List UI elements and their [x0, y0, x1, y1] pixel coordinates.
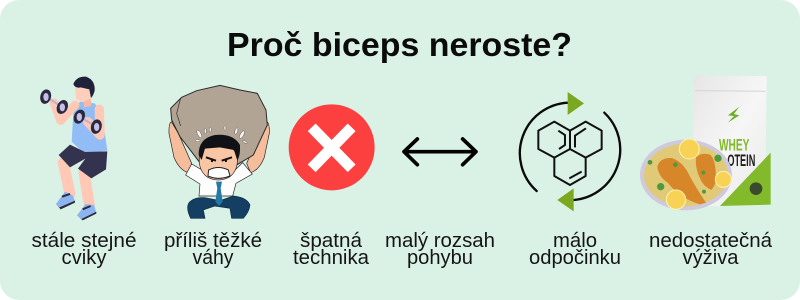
- label: malý rozsah pohybu: malý rozsah: [385, 230, 495, 252]
- icon: recovery cycle with molecule: [520, 92, 620, 211]
- label: stále stejné cviky: [32, 230, 136, 269]
- icon: man lifting heavy rock: [169, 85, 269, 218]
- title: Proč biceps neroste?: [227, 26, 572, 63]
- icon: red cross circle: [289, 104, 375, 190]
- label: nedostatečná výživa: nedostatečná: [649, 230, 773, 252]
- chicken plate: [640, 140, 732, 210]
- icon: whey protein bag and chicken plate: WHEY: [719, 136, 749, 155]
- label: málo odpočinku: [529, 230, 621, 269]
- label: málo odpočinku: odpočinku: [529, 247, 621, 269]
- icon: man curling dumbbells: [39, 77, 107, 220]
- label: špatná technika: špatná: [300, 230, 363, 252]
- protein bag: [693, 75, 771, 207]
- label: malý rozsah pohybu: pohybu: [407, 247, 473, 269]
- label: stále stejné cviky: cviky: [62, 247, 106, 269]
- label: nedostatečná výživa: výživa: [682, 247, 739, 269]
- icon: double-headed arrow: [404, 139, 476, 165]
- label: málo odpočinku: málo: [553, 230, 597, 252]
- label: malý rozsah pohybu: [385, 230, 495, 269]
- label: příliš těžké váhy: příliš těžké: [164, 230, 262, 252]
- label: stále stejné cviky: stále stejné: [32, 230, 136, 252]
- label: špatná technika: technika: [293, 247, 370, 269]
- label: příliš těžké váhy: [164, 230, 262, 269]
- icon: whey protein bag and chicken plate: OTEIN: [727, 151, 755, 170]
- label: příliš těžké váhy: váhy: [192, 247, 234, 269]
- icon: whey protein bag and chicken plate: [640, 75, 771, 210]
- label: špatná technika: [293, 230, 370, 269]
- label: nedostatečná výživa: [649, 230, 773, 269]
